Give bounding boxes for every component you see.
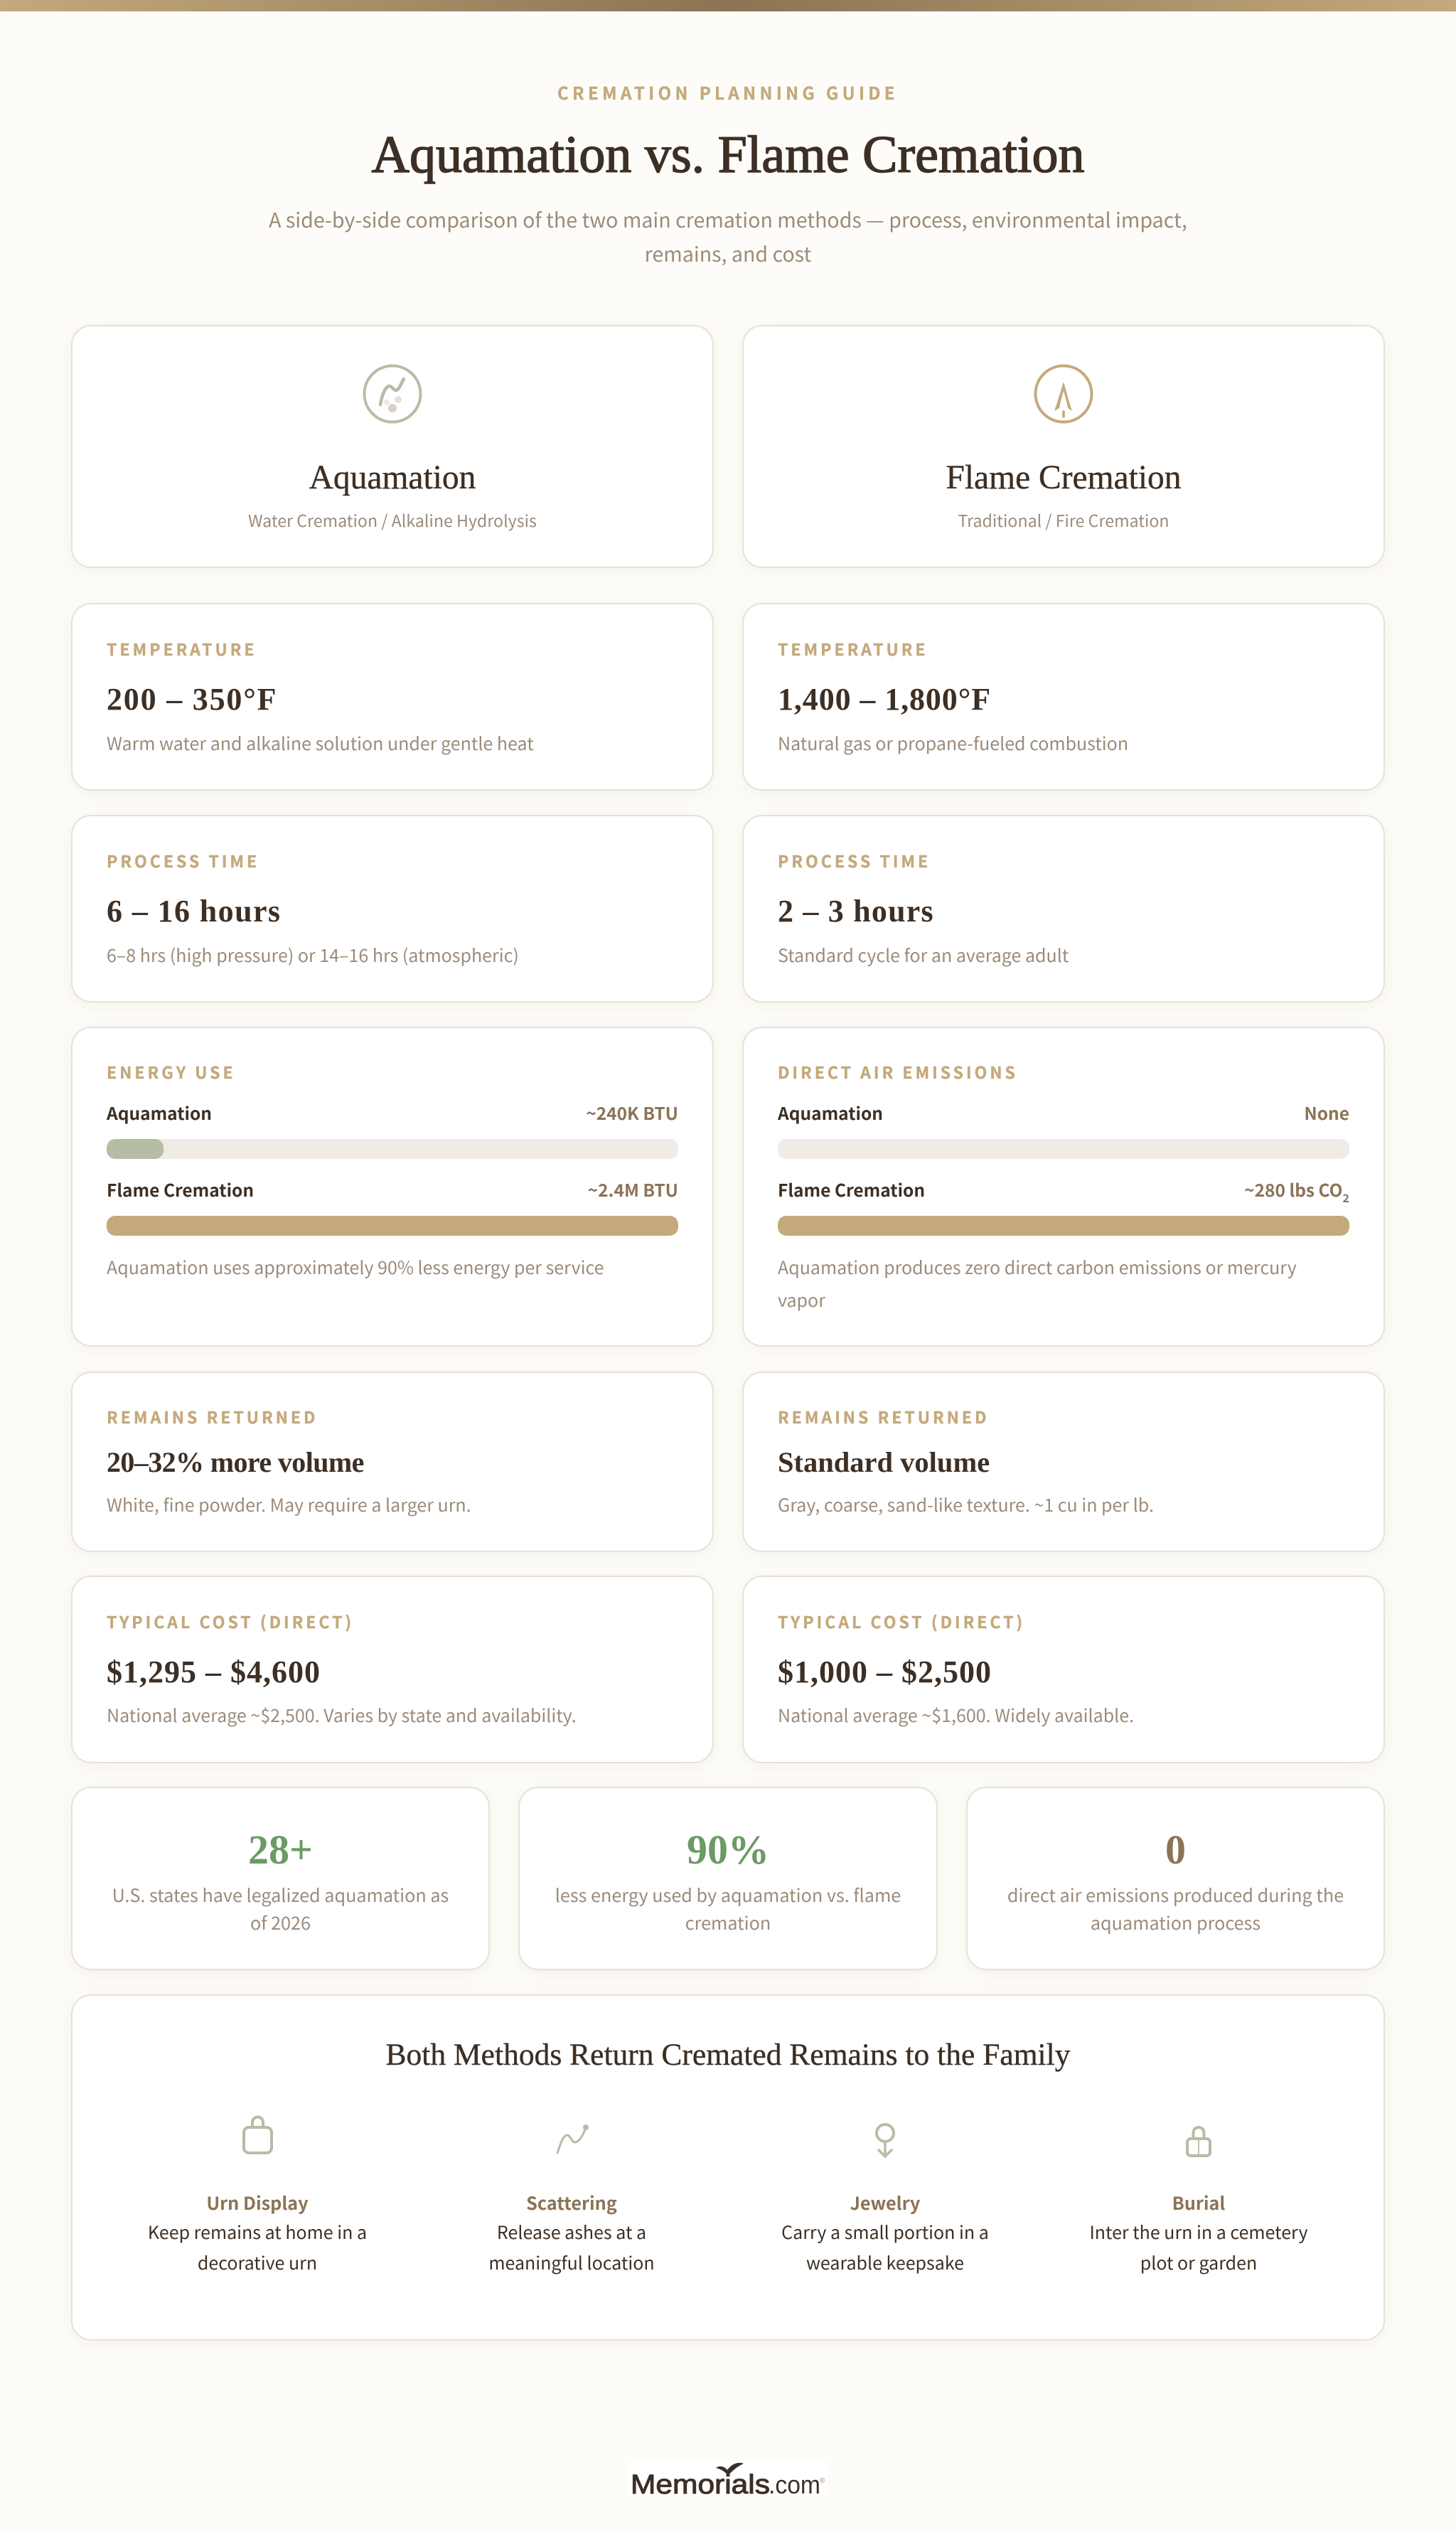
value: 2 – 3 hours xyxy=(778,894,934,929)
description: National average ~$1,600. Widely available. xyxy=(778,1702,1134,1728)
label: TYPICAL COST (DIRECT) xyxy=(778,1609,1025,1633)
item: burial description xyxy=(1089,2219,1308,2275)
logo: Memorials.com xyxy=(628,2461,828,2496)
panel: flame cost xyxy=(742,1576,1385,1763)
title: Aquamation vs. Flame Cremation xyxy=(372,126,1084,184)
panel: what families can do with remains xyxy=(71,1994,1385,2341)
panel: aquamation cost xyxy=(71,1576,714,1763)
subtitle: remains, and cost xyxy=(645,239,811,268)
stat description xyxy=(112,1882,449,1935)
panel: aquamation header xyxy=(71,325,714,568)
row value: aquamation: ~240K BTU xyxy=(586,1101,678,1126)
label: REMAINS RETURNED xyxy=(107,1404,318,1428)
icon: urn xyxy=(242,2116,273,2154)
row value: flame: ~280 lbs CO2 xyxy=(1244,1177,1349,1206)
bar: aquamation xyxy=(107,1139,678,1159)
panel: flame temperature xyxy=(742,603,1385,791)
bar: aquamation xyxy=(778,1139,1349,1159)
note: Aquamation produces zero direct carbon emissions or mercury xyxy=(778,1254,1297,1280)
label: TYPICAL COST (DIRECT) xyxy=(107,1609,354,1633)
icon: burial xyxy=(1186,2126,1211,2157)
subtitle xyxy=(269,205,1187,268)
subtitle: Water Cremation / Alkaline Hydrolysis xyxy=(248,508,537,532)
stat card: energy xyxy=(518,1787,938,1970)
stat description: U.S. states have legalized aquamation as xyxy=(112,1882,449,1908)
description: Standard cycle for an average adult xyxy=(778,942,1069,968)
description: National average ~$2,500. Varies by state and availability. xyxy=(107,1702,577,1728)
subtitle: Traditional / Fire Cremation xyxy=(958,508,1169,532)
row value: aquamation: None xyxy=(1304,1101,1349,1126)
item: jewelry description: Carry a small portion in a xyxy=(781,2219,989,2245)
label: REMAINS RETURNED xyxy=(778,1404,989,1428)
stat number: 28+ xyxy=(248,1827,313,1873)
panel: aquamation remains xyxy=(71,1372,714,1552)
note: vapor xyxy=(778,1287,825,1313)
description: Natural gas or propane-fueled combustion xyxy=(778,730,1128,756)
panel: flame remains xyxy=(742,1372,1385,1552)
label: PROCESS TIME xyxy=(778,848,931,872)
item: scattering description: meaningful location xyxy=(488,2250,655,2275)
subtitle: A side-by-side comparison of the two main cremation methods — process, environmental impact, xyxy=(269,205,1187,234)
label: DIRECT AIR EMISSIONS xyxy=(778,1059,1018,1084)
item: burial description: Inter the urn in a cemetery xyxy=(1089,2219,1308,2245)
item: scattering title: Scattering xyxy=(526,2190,617,2215)
heading: Flame Cremation xyxy=(946,459,1182,496)
row label: aquamation: Aquamation xyxy=(107,1101,212,1126)
stat number: 90% xyxy=(687,1827,769,1873)
value: Standard volume xyxy=(778,1446,990,1478)
stat number: 0 xyxy=(1165,1827,1186,1873)
description: White, fine powder. May require a larger urn. xyxy=(107,1492,471,1517)
stat description: of 2026 xyxy=(250,1910,311,1935)
value: 6 – 16 hours xyxy=(107,894,281,929)
panel: energy use xyxy=(71,1027,714,1347)
panel: direct air emissions xyxy=(742,1027,1385,1347)
icon: aquamation water xyxy=(363,364,422,424)
stat card: states xyxy=(71,1787,490,1970)
value: 200 – 350°F xyxy=(107,682,277,717)
description: 6–8 hrs (high pressure) or 14–16 hrs (atmospheric) xyxy=(107,942,519,968)
bar: flame xyxy=(778,1216,1349,1236)
note xyxy=(778,1254,1297,1313)
bar: flame xyxy=(107,1216,678,1236)
heading: Aquamation xyxy=(309,459,476,496)
item: urn display description: Keep remains at home in a xyxy=(148,2219,367,2245)
item: urn display description: decorative urn xyxy=(198,2250,317,2275)
label: TEMPERATURE xyxy=(778,636,928,661)
label: ENERGY USE xyxy=(107,1059,236,1084)
item: scattering description: Release ashes at a xyxy=(497,2219,646,2245)
row label: flame: Flame Cremation xyxy=(778,1177,925,1202)
icon: jewelry xyxy=(875,2123,895,2159)
eyebrow: CREMATION PLANNING GUIDE xyxy=(557,80,899,105)
value: $1,295 – $4,600 xyxy=(107,1654,321,1689)
panel: aquamation process time xyxy=(71,815,714,1003)
icon: flame xyxy=(1034,364,1093,424)
panel: aquamation temperature xyxy=(71,603,714,791)
row label: flame: Flame Cremation xyxy=(107,1177,254,1202)
value: 20–32% more volume xyxy=(107,1446,364,1478)
item: jewelry title: Jewelry xyxy=(850,2190,920,2215)
item: urn display description xyxy=(148,2219,367,2275)
icon: scattering xyxy=(556,2124,589,2154)
item: jewelry description: wearable keepsake xyxy=(806,2250,964,2275)
item: burial description: plot or garden xyxy=(1140,2250,1257,2275)
stat description: less energy used by aquamation vs. flame cremation xyxy=(555,1882,901,1935)
row value: flame: ~2.4M BTU xyxy=(588,1177,678,1202)
note: Aquamation uses approximately 90% less energy per service xyxy=(107,1254,604,1280)
label: TEMPERATURE xyxy=(107,636,257,661)
description: Gray, coarse, sand-like texture. ~1 cu in per lb. xyxy=(778,1492,1154,1517)
value: $1,000 – $2,500 xyxy=(778,1654,992,1689)
panel heading: Both Methods Return Cremated Remains to the Family xyxy=(386,2038,1070,2072)
label: PROCESS TIME xyxy=(107,848,259,872)
panel: flame header xyxy=(742,325,1385,568)
description: Warm water and alkaline solution under gentle heat xyxy=(107,730,534,756)
item: burial title: Burial xyxy=(1172,2190,1225,2215)
top gradient bar xyxy=(0,0,1456,11)
value: 1,400 – 1,800°F xyxy=(778,682,991,717)
logo: Memorials.com: ® xyxy=(820,2477,825,2485)
row label: aquamation: Aquamation xyxy=(778,1101,883,1126)
stat card: emissions xyxy=(966,1787,1385,1970)
stat description: direct air emissions produced during the aquamation process xyxy=(1007,1882,1344,1935)
panel: flame process time xyxy=(742,815,1385,1003)
item: jewelry description xyxy=(781,2219,989,2275)
item: scattering description xyxy=(488,2219,655,2275)
item: urn display title: Urn Display xyxy=(206,2190,309,2215)
